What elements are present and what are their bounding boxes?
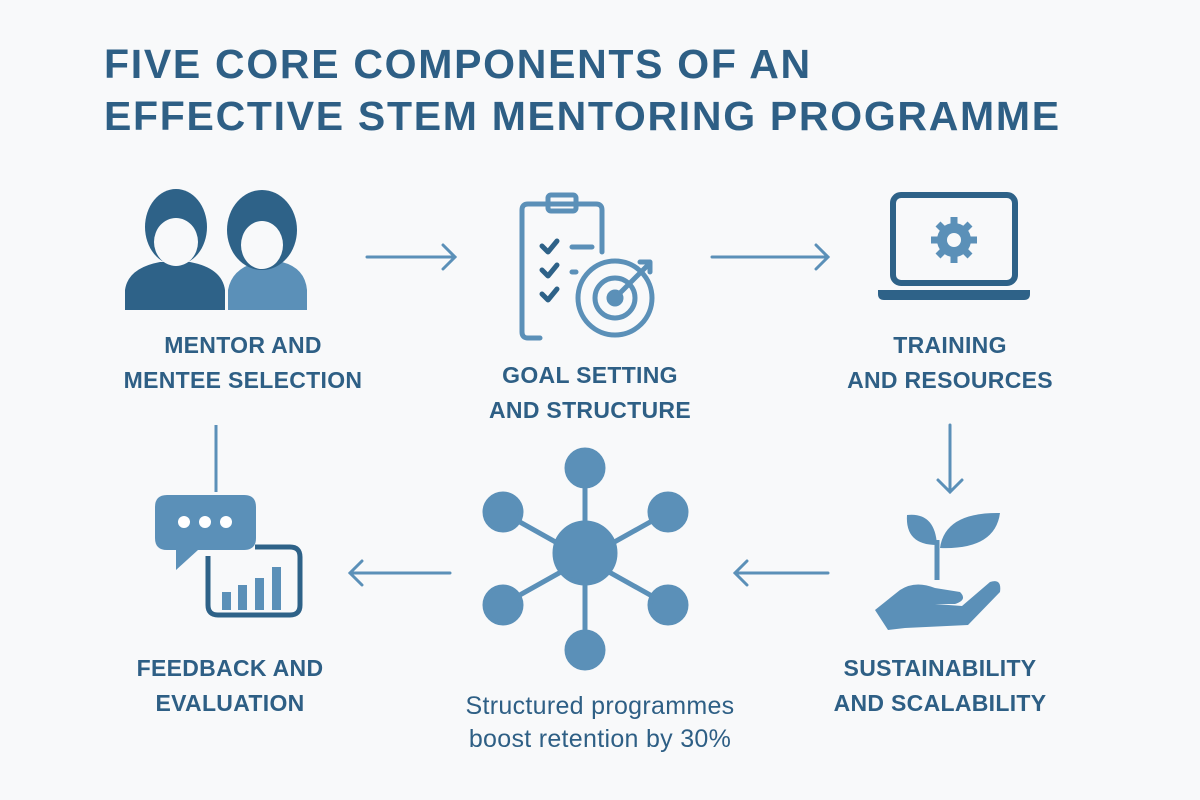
caption: retention stat: boost retention by 30%: [469, 725, 731, 753]
label: mentor and mentee selection: MENTOR AND: [164, 332, 322, 358]
title: EFFECTIVE STEM MENTORING PROGRAMME: [104, 93, 1061, 139]
connector: 1 down: [214, 425, 218, 492]
arrow: 5 to feedback: [350, 561, 450, 585]
label: feedback: [137, 655, 323, 716]
label: feedback: FEEDBACK AND: [137, 655, 323, 681]
label: sustainability: SUSTAINABILITY: [844, 655, 1036, 681]
label: mentor and mentee selection: [124, 332, 362, 393]
label: training: [847, 332, 1053, 393]
caption: retention stat: [466, 692, 734, 753]
label: goal setting: [489, 362, 691, 423]
label: feedback: EVALUATION: [155, 690, 305, 716]
title: FIVE CORE COMPONENTS OF AN: [104, 41, 812, 87]
title: [104, 41, 1061, 139]
arrow: 2 to 3: [712, 245, 828, 269]
icon: feedback chat and chart: [155, 495, 300, 615]
label: goal setting: AND STRUCTURE: [489, 397, 691, 423]
arrow: 3 to 4: [938, 425, 962, 492]
arrow: 4 to 5: [735, 561, 828, 585]
label: goal setting: GOAL SETTING: [502, 362, 678, 388]
label: sustainability: AND SCALABILITY: [834, 690, 1046, 716]
label: mentor and mentee selection: MENTEE SELECTION: [124, 367, 362, 393]
label: training: TRAINING: [893, 332, 1007, 358]
icon: mentor and mentee: [125, 189, 307, 310]
icon: clipboard target: [522, 195, 652, 338]
icon: network hub: [485, 450, 686, 668]
label: training: AND RESOURCES: [847, 367, 1053, 393]
icon: laptop with gear: [878, 195, 1030, 300]
arrow: 1 to 2: [367, 245, 455, 269]
icon: plant in hand: [875, 513, 1000, 630]
label: sustainability: [834, 655, 1046, 716]
caption: retention stat: Structured programmes: [466, 692, 734, 720]
